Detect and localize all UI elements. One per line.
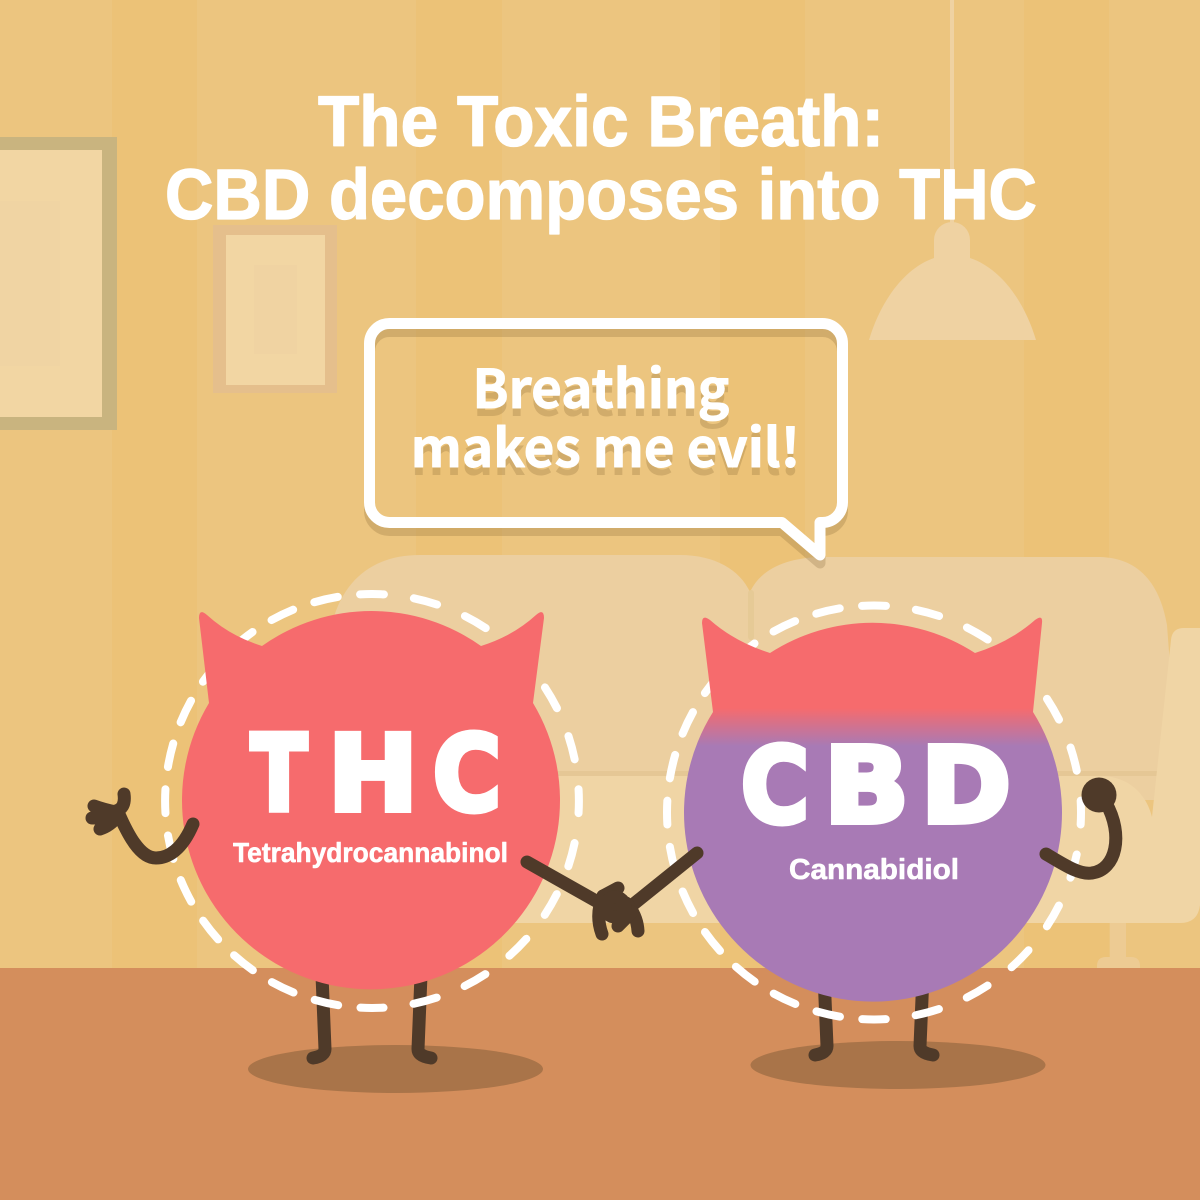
character: CBD bbox=[625, 606, 1116, 1089]
CBD full name: Cannabidiol bbox=[789, 854, 959, 886]
CBD letters bbox=[741, 725, 1011, 847]
THC letters: C bbox=[433, 713, 501, 835]
CBD dashed ring bbox=[667, 606, 1081, 1020]
CBD legs bbox=[815, 975, 933, 1055]
small picture frame bbox=[213, 225, 337, 393]
THC dashed ring bbox=[165, 594, 579, 1008]
THC ground shadow bbox=[248, 1045, 543, 1093]
bubble text shadow bbox=[411, 356, 800, 491]
THC letters: T bbox=[251, 713, 307, 835]
bubble text shadow: Breathing bbox=[473, 356, 729, 432]
CBD body bbox=[684, 618, 1062, 1002]
bubble text: makes me evil! bbox=[411, 407, 800, 483]
CBD left arm bbox=[625, 853, 697, 911]
CBD right arm with raised fist bbox=[1046, 778, 1116, 873]
sofa bbox=[280, 555, 1200, 968]
joined hands bbox=[599, 888, 638, 934]
floor bbox=[0, 968, 1200, 1200]
bubble text bbox=[411, 348, 800, 483]
bubble text shadow: makes me evil! bbox=[411, 415, 800, 491]
large picture frame bbox=[0, 137, 117, 430]
title: CBD decomposes into THC bbox=[165, 156, 1037, 235]
CBD ground shadow bbox=[750, 1041, 1046, 1089]
speech bubble bbox=[370, 324, 842, 563]
bubble text: Breathing bbox=[473, 348, 729, 424]
CBD letters: C bbox=[741, 725, 809, 847]
THC right arm bbox=[527, 862, 612, 910]
title bbox=[165, 83, 1037, 235]
CBD letters: B bbox=[824, 725, 909, 847]
THC body bbox=[182, 611, 560, 989]
ceiling lamp bbox=[869, 0, 1036, 340]
THC letters bbox=[251, 713, 501, 835]
bubble shadow bbox=[370, 332, 842, 563]
THC left arm and hand bbox=[92, 794, 193, 858]
bubble outline bbox=[370, 324, 842, 555]
THC full name: Tetrahydrocannabinol bbox=[233, 837, 508, 868]
character: THC bbox=[92, 594, 612, 1093]
CBD letters: D bbox=[921, 725, 1011, 847]
THC legs bbox=[313, 975, 431, 1058]
title: The Toxic Breath: bbox=[318, 83, 884, 162]
THC letters: H bbox=[328, 713, 418, 835]
